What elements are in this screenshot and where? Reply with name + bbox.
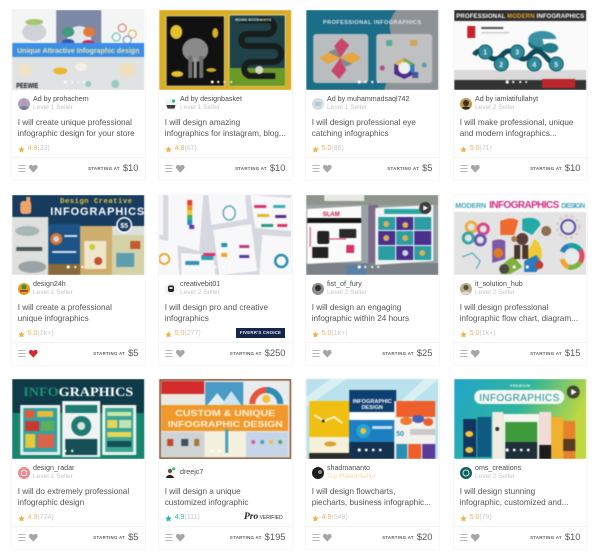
icons: menu and heart: [312, 533, 332, 542]
gig title: infographic design for your store: [18, 129, 135, 138]
gig title: [165, 303, 268, 323]
panel: gig card by it_solution_hub: [454, 195, 586, 365]
icons: menu and heart: [460, 164, 480, 172]
thumbnail: unique attractive infographic design: Unique Attractive Infographic design: [17, 48, 139, 55]
thumbnail: premium infographics with play button: [454, 379, 586, 459]
thumbnail: modern infographics design: MODERN: [455, 201, 486, 210]
icons: menu and heart: [165, 164, 185, 172]
rating: 4.9(724): [28, 514, 54, 521]
avatar: [165, 283, 177, 295]
seller name and level: Level 2 Seller: [475, 473, 515, 480]
thumbnail: design creative infographics: INFOGRAPHICS: [50, 206, 144, 218]
rating: [460, 145, 492, 152]
seller name and level: it_solution_hub: [475, 280, 523, 288]
seller name and level: [33, 280, 73, 296]
rating: 5.0(1k+): [322, 330, 348, 337]
gig title: infographics for instagram, blog...: [165, 129, 286, 138]
thumbnail: three infographic posters: 50: [396, 431, 404, 438]
icons: menu and heart: [165, 350, 185, 358]
seller name and level: fist_of_fury: [327, 280, 362, 288]
price: STARTING AT $20: [382, 531, 432, 542]
gig title: [312, 303, 409, 323]
rating: 5.0(277): [175, 330, 201, 337]
gig title: [312, 487, 437, 508]
thumbnail: dark infographics on gold: [159, 10, 292, 90]
seller name: dreejc7: [180, 468, 203, 476]
rating: [18, 330, 54, 338]
rating: [165, 145, 197, 152]
gig title: unique infographics: [18, 314, 89, 323]
seller name and level: Ad by muhammadsaql742: [327, 95, 409, 103]
rating: [460, 514, 520, 522]
panel: gig card by oms_creations: [454, 379, 586, 549]
gig title: I will design stunning: [460, 487, 535, 496]
avatar: [18, 283, 30, 295]
panel: gig card by iamlatifullahyt: [454, 10, 586, 180]
seller name and level: [33, 464, 141, 482]
thumbnail: three infographic posters: DESIGN: [362, 405, 383, 411]
gig title: I will design pro and creative: [165, 303, 268, 312]
seller name and level: Level 1 Seller: [180, 104, 220, 111]
price: STARTING AT $10: [235, 162, 286, 173]
panel: gig card by shadmananto: [306, 379, 438, 549]
gig title: [165, 118, 286, 138]
avatar: [460, 467, 472, 479]
gig title: [312, 118, 416, 138]
gig title: I will design flowcharts,: [312, 487, 395, 496]
icons: menu and heart: [312, 164, 332, 172]
thumbnail: design creative infographics: $5: [120, 223, 128, 230]
thumbnail: modern infographics design: [454, 200, 586, 275]
seller name and level: Level 1 Seller: [327, 104, 367, 111]
thumbnail: tilted infographic pages: [159, 195, 292, 275]
price: STARTING AT $5: [93, 347, 138, 358]
badge: Fiverr's Choice: FIVERR'S CHOICE: [240, 330, 281, 335]
rating: [460, 330, 520, 338]
price: STARTING AT $10: [530, 162, 580, 173]
gig title: [460, 118, 574, 138]
thumbnail: professional modern infographics: 5: [554, 62, 558, 69]
gig title: customized infographic: [165, 498, 248, 507]
gig title: [18, 118, 135, 138]
thumbnail: design creative infographics: Design Creative: [60, 198, 133, 206]
seller name and level: [180, 280, 220, 296]
avatar: [312, 98, 324, 110]
thumbnail: three infographic posters: [306, 379, 438, 459]
avatar: [165, 98, 177, 110]
rating: 5.0(86): [322, 145, 344, 152]
seller name and level: [475, 95, 538, 111]
icons: menu and heart: [312, 349, 332, 358]
avatar: [18, 98, 30, 110]
thumbnail: tilted posters with play button: [306, 195, 438, 275]
thumbnail: infographics posters: [12, 379, 144, 459]
seller name and level: Level 1 Seller: [33, 104, 73, 111]
seller name and level: Level 2 Seller: [180, 289, 220, 296]
thumbnail: infographics posters: INFOGRAPHICS: [23, 384, 133, 399]
seller name and level: [180, 95, 242, 111]
price: STARTING AT $195: [230, 531, 286, 542]
price: STARTING AT $5: [387, 162, 432, 173]
rating: 5.0(79): [470, 514, 492, 521]
rating: [312, 514, 372, 522]
thumbnail: professional modern infographics: [454, 10, 586, 90]
panel: gig card by muhammadsaql742: [306, 10, 438, 180]
thumbnail: design creative infographics: [12, 195, 144, 275]
icons: menu and heart: [18, 533, 38, 542]
gig title: [165, 487, 290, 508]
gig title: [460, 487, 585, 508]
gig title: I will create a professional: [18, 303, 112, 312]
thumbnail: professional modern infographics: 1: [483, 50, 487, 56]
thumbnail: professional modern infographics: 2: [499, 62, 503, 69]
icons: menu and heart: [460, 349, 480, 358]
thumbnail: professional modern infographics: PROFESSIONAL MODERN INFOGRAPHICS: [456, 14, 584, 20]
seller name and level: [475, 464, 583, 482]
rating: [312, 145, 344, 152]
gig title: infographic, customized and...: [460, 498, 568, 507]
seller name and level: design_radar: [33, 464, 74, 472]
avatar: [18, 467, 30, 479]
seller name and level: shadmananto: [327, 464, 370, 472]
thumbnail: unique attractive infographic design: PEEWIE: [16, 83, 39, 90]
panel: gig card by designbasket: [159, 10, 292, 180]
thumbnail: custom and unique infographic design: CUSTOM & UNIQUE: [175, 409, 276, 418]
thumbnail: unique attractive infographic design: [12, 10, 144, 90]
thumbnail: professional infographics: [306, 10, 438, 90]
thumbnail: professional modern infographics: 3: [515, 50, 519, 56]
panel: gig card by dreejc7: [159, 379, 292, 549]
thumbnail: premium infographics with play button: PREMIUM: [510, 384, 530, 388]
rating: 4.9(33): [28, 145, 50, 152]
price: STARTING AT $5: [93, 531, 138, 542]
price: STARTING AT $10: [88, 162, 138, 173]
seller name and level: [327, 95, 410, 111]
thumbnail: modern infographics design: DESIGN: [561, 201, 585, 210]
icons: menu and heart: [164, 533, 184, 542]
seller name and level: Level 2 Seller: [475, 104, 515, 111]
seller name and level: Ad by iamlatifullahyt: [475, 95, 538, 103]
gig title: I will design an engaging: [312, 303, 401, 312]
rating: 5.0(71): [470, 145, 492, 152]
gig title: piecharts, business infographic...: [312, 498, 431, 507]
price: STARTING AT $25: [382, 347, 432, 358]
gig title: and modern infographics...: [460, 129, 557, 138]
seller name and level: [475, 280, 583, 298]
price: STARTING AT $15: [530, 347, 580, 358]
gig title: I will do extremely professional: [18, 487, 129, 496]
seller name and level: design24h: [33, 280, 66, 288]
seller name and level: [327, 280, 367, 296]
thumbnail: custom and unique infographic design: INFOGRAPHIC DESIGN: [168, 420, 283, 429]
gig title: I will design amazing: [165, 118, 240, 127]
gig title: infographic within 24 hours: [312, 314, 409, 323]
gig title: I will design professional eye: [312, 118, 416, 127]
seller name and level: [327, 464, 435, 482]
panel: gig card by design24h: [12, 195, 144, 365]
seller name and level: Top Rated Seller: [327, 473, 376, 480]
gig title: I will design a unique: [165, 487, 241, 496]
thumbnail: custom and unique infographic design: [159, 379, 292, 459]
rating: 5.0(1k+): [470, 330, 496, 337]
thumbnail: modern infographics design: INFOGRAPHICS: [489, 200, 560, 211]
icons: menu and red heart: [18, 350, 38, 358]
gig title: [18, 487, 143, 508]
panel: gig card by fist_of_fury: [306, 195, 438, 365]
panel: gig card by prohachem: [12, 10, 144, 180]
rating: 4.9(549): [322, 514, 348, 521]
panel: gig card by creativebit01: [159, 195, 292, 365]
price: STARTING AT $10: [530, 531, 580, 542]
gig title: I will create unique professional: [18, 118, 132, 127]
thumbnail: premium infographics with play button: INFOGRAPHICS: [479, 393, 560, 404]
panel: gig card by design_radar: [12, 379, 144, 549]
badge: Fiverr's Choice: [236, 328, 285, 338]
badge: Pro verified: Pro VERIFIED: [244, 512, 283, 522]
avatar: [460, 283, 472, 295]
thumbnail: three infographic posters: INFOGRAPHIC: [353, 399, 392, 405]
gig title: infographics: [165, 314, 209, 323]
rating: [18, 145, 50, 152]
avatar: [312, 467, 324, 479]
rating: [164, 514, 224, 522]
seller name and level: Level 2 Seller: [33, 473, 73, 480]
gig title: infographic flow chart, diagram...: [460, 314, 578, 323]
seller name and level: oms_creations: [475, 464, 521, 472]
thumbnail: dark infographics on gold: ROAD ACCIDENTS: [235, 17, 272, 22]
rating: 5.0(1k+): [28, 330, 54, 337]
seller name and level: creativebit01: [180, 280, 220, 288]
gig title: I will design professional: [460, 303, 548, 312]
thumbnail: professional infographics: PROFESSIONAL INFOGRAPHICS: [323, 20, 421, 26]
seller name and level: Ad by designbasket: [180, 95, 242, 103]
icons: menu and heart: [460, 533, 480, 542]
seller name and level: Level 2 Seller: [327, 289, 367, 296]
rating: [165, 330, 201, 338]
seller name and level: Level 2 Seller: [33, 289, 73, 296]
avatar: [460, 98, 472, 110]
rating: [312, 330, 348, 338]
thumbnail: professional modern infographics: 4: [532, 62, 536, 69]
thumbnail: tilted posters with play button: SLAM: [323, 212, 340, 218]
avatar: [312, 283, 324, 295]
gig title: [460, 303, 585, 324]
gig title: I will make professional, unique: [460, 118, 573, 127]
seller name and level: [33, 95, 89, 111]
avatar with online dot: [164, 467, 176, 479]
seller name and level: Ad by prohachem: [33, 95, 89, 103]
gig title: infographic design: [18, 498, 84, 507]
rating: [18, 514, 78, 522]
rating: 4.8(67): [175, 145, 197, 152]
gig title: catching infographics: [312, 129, 389, 138]
seller name and level: Level 2 Seller: [475, 289, 515, 296]
rating: 4.9(111): [175, 514, 200, 521]
price: STARTING AT $250: [230, 347, 286, 358]
icons: menu and heart: [18, 164, 38, 172]
gig title: [18, 303, 112, 323]
